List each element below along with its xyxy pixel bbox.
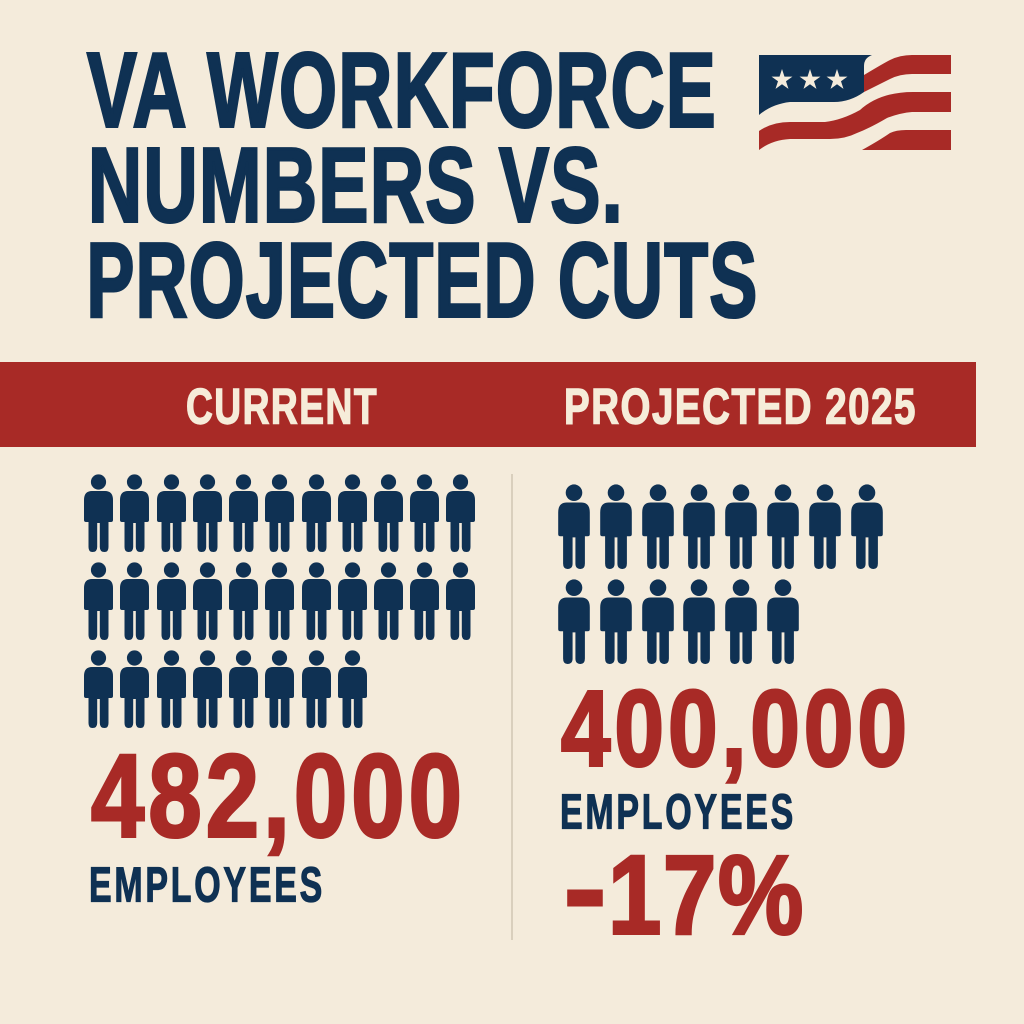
header band: CURRENT: [186, 378, 378, 434]
number: 482,000: 482,000: [91, 730, 466, 862]
number: 400,000: 400,000: [561, 668, 911, 788]
label: employees: EMPLOYEES: [560, 786, 796, 840]
pictogram: projected workforce: [558, 484, 883, 664]
number: minus 17 percent: –: [567, 828, 603, 952]
header band: PROJECTED 2025: [564, 378, 917, 434]
title: NUMBERS VS.: [88, 126, 624, 244]
title: [86, 32, 758, 340]
title: VA WORKFORCE: [87, 32, 717, 150]
panel: current: [84, 474, 475, 912]
icon: American flag: [759, 55, 951, 150]
pictogram: current workforce: [84, 474, 475, 728]
panel: projected: [558, 484, 911, 958]
number: minus 17 percent: 17%: [608, 832, 805, 958]
header band: [0, 362, 976, 447]
label: employees: EMPLOYEES: [89, 858, 325, 912]
